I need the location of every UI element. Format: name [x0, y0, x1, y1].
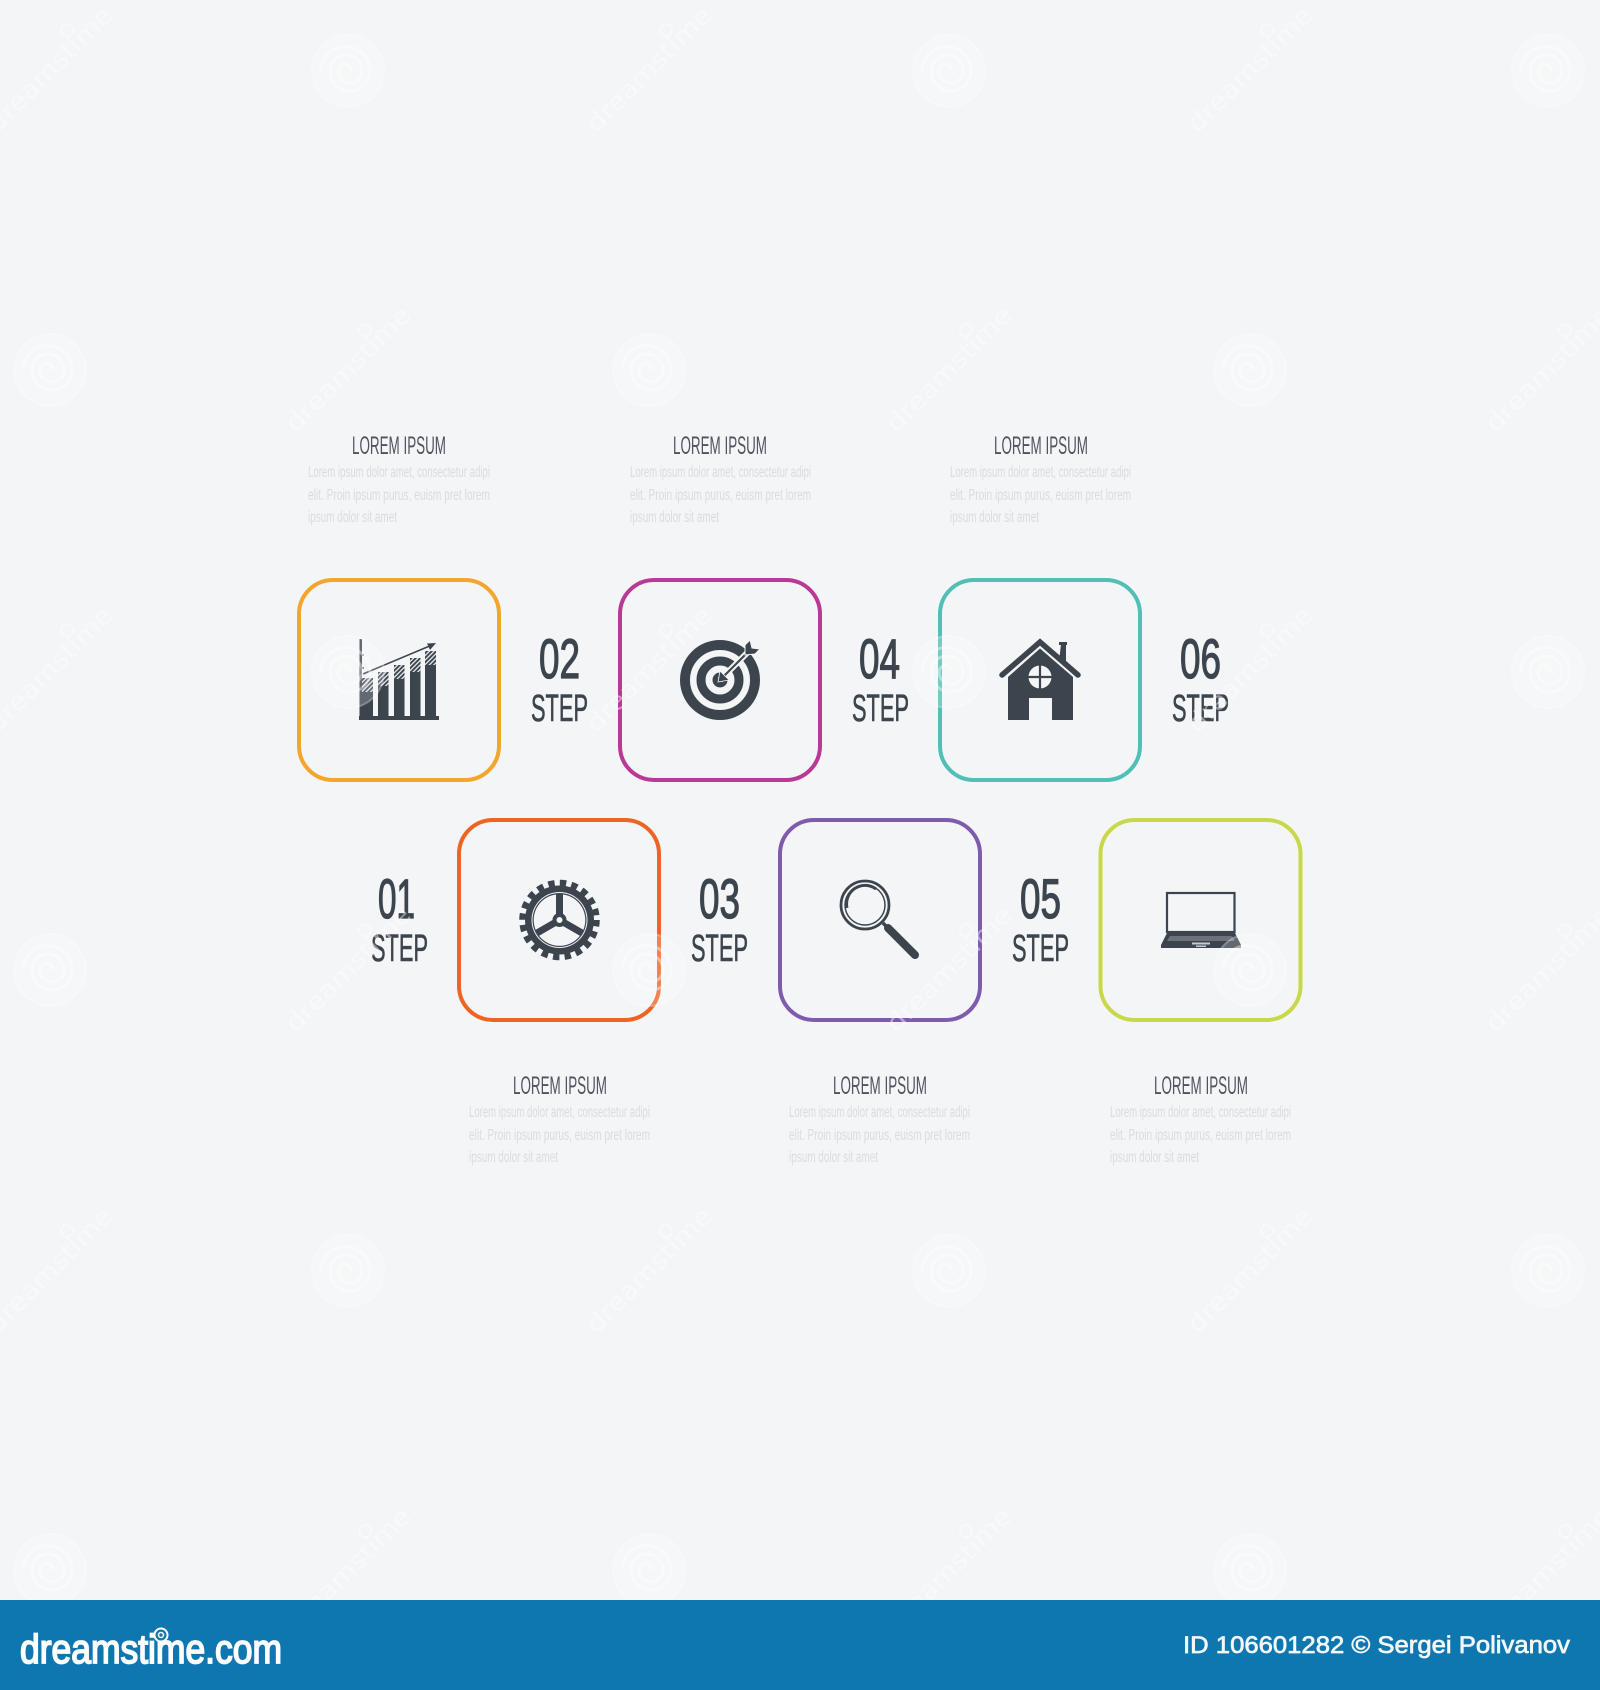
- step label 04: [852, 627, 909, 730]
- watermark: spirals and diagonal text: dreamstime: [279, 300, 417, 438]
- step label 05: 05: [1020, 867, 1061, 930]
- step label 01: [371, 867, 428, 970]
- step label 05: [1012, 867, 1069, 970]
- step label 04: STEP: [852, 688, 909, 730]
- step label 01: STEP: [371, 928, 428, 970]
- watermark: spirals and diagonal text: dreamstime: [880, 1501, 1018, 1639]
- step label 03: STEP: [691, 928, 748, 970]
- panel: step 04 text above: ipsum dolor sit amet: [630, 509, 719, 526]
- panel: step 03 text below: elit. Proin ipsum purus, euism pret lorem: [789, 1127, 970, 1144]
- panel: step 05 text below: ipsum dolor sit amet: [1110, 1149, 1199, 1166]
- watermark: spirals and diagonal text: dreamstime: [1181, 1201, 1319, 1339]
- watermark: spirals and diagonal text: dreamstime: [1181, 600, 1319, 738]
- panel: step 05 text below: [1110, 1072, 1291, 1166]
- panel: step 06 text above: [950, 432, 1131, 526]
- icon: laptop: [1161, 893, 1241, 948]
- panel: step 01 text below: ipsum dolor sit amet: [469, 1149, 558, 1166]
- step label 02: STEP: [531, 688, 588, 730]
- panel: step 03 text below: ipsum dolor sit amet: [789, 1149, 878, 1166]
- panel: step 04 text above: elit. Proin ipsum purus, euism pret lorem: [630, 487, 811, 504]
- step label 03: 03: [699, 867, 740, 930]
- icon: magnifying glass: [841, 881, 915, 955]
- panel: step 01 text below: elit. Proin ipsum purus, euism pret lorem: [469, 1127, 650, 1144]
- panel: step 05 text below: elit. Proin ipsum purus, euism pret lorem: [1110, 1127, 1291, 1144]
- icon: gear: [523, 884, 596, 956]
- step label 06: 06: [1180, 627, 1221, 690]
- panel: step 02 text above: [308, 432, 490, 526]
- panel: step 04 text above: Lorem ipsum dolor amet, consectetur adipi: [630, 464, 811, 481]
- icon: bar chart: [359, 639, 439, 720]
- watermark: spirals and diagonal text: dreamstime: [580, 1201, 718, 1339]
- box: lime: [1100, 820, 1300, 1020]
- watermark: spirals and diagonal text: dreamstime: [1181, 0, 1319, 138]
- panel: step 02 text above: LOREM IPSUM: [352, 432, 446, 460]
- panel: step 02 text above: elit. Proin ipsum purus, euism pret lorem: [308, 487, 490, 504]
- icon: target with arrow: [685, 640, 760, 715]
- step label 05: STEP: [1012, 928, 1069, 970]
- box: red-orange: [459, 820, 659, 1020]
- panel: step 03 text below: LOREM IPSUM: [833, 1072, 927, 1100]
- step label 06: [1172, 627, 1229, 730]
- box: magenta: [620, 580, 820, 780]
- box: orange: [299, 580, 499, 780]
- box: teal: [940, 580, 1140, 780]
- step label 02: [531, 627, 588, 730]
- footer logo: dreamstime.com: [20, 1626, 282, 1672]
- footer credit: ID 106601282 © Sergei Polivanov: [1183, 1632, 1571, 1659]
- step label 02: 02: [539, 627, 580, 690]
- panel: step 06 text above: ipsum dolor sit amet: [950, 509, 1039, 526]
- panel: step 05 text below: Lorem ipsum dolor amet, consectetur adipi: [1110, 1104, 1291, 1121]
- panel: step 01 text below: LOREM IPSUM: [513, 1072, 607, 1100]
- watermark: spirals and diagonal text: dreamstime: [279, 900, 417, 1038]
- box: purple: [780, 820, 980, 1020]
- watermark: spirals and diagonal text: dreamstime: [880, 300, 1018, 438]
- panel: step 04 text above: [630, 432, 811, 526]
- icon: house: [1002, 642, 1078, 720]
- panel: step 06 text above: LOREM IPSUM: [994, 432, 1088, 460]
- panel: step 03 text below: Lorem ipsum dolor amet, consectetur adipi: [789, 1104, 970, 1121]
- panel: step 01 text below: [469, 1072, 650, 1166]
- step label 01: 01: [378, 867, 415, 930]
- panel: step 04 text above: LOREM IPSUM: [673, 432, 767, 460]
- panel: step 01 text below: Lorem ipsum dolor amet, consectetur adipi: [469, 1104, 650, 1121]
- panel: step 05 text below: LOREM IPSUM: [1154, 1072, 1248, 1100]
- watermark: spirals and diagonal text: dreamstime: [580, 600, 718, 738]
- panel: step 06 text above: Lorem ipsum dolor amet, consectetur adipi: [950, 464, 1131, 481]
- step label 06: STEP: [1172, 688, 1229, 730]
- step label 04: 04: [859, 627, 900, 690]
- watermark: spirals and diagonal text: dreamstime: [279, 1501, 417, 1639]
- watermark: spirals and diagonal text: dreamstime: [880, 900, 1018, 1038]
- panel: step 06 text above: elit. Proin ipsum purus, euism pret lorem: [950, 487, 1131, 504]
- panel: step 03 text below: [789, 1072, 970, 1166]
- panel: step 02 text above: ipsum dolor sit amet: [308, 509, 397, 526]
- step label 03: [691, 867, 748, 970]
- footer bar: [0, 1600, 1600, 1690]
- panel: step 02 text above: Lorem ipsum dolor amet, consectetur adipi: [308, 464, 490, 481]
- watermark: spirals and diagonal text: dreamstime: [580, 0, 718, 138]
